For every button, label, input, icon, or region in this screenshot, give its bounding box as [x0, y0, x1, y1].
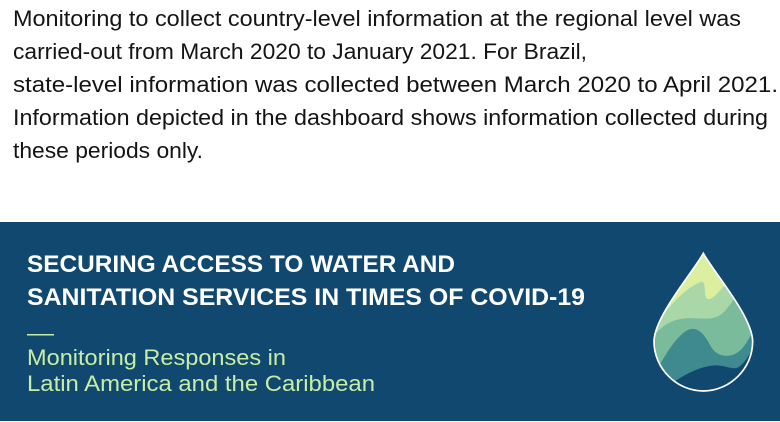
icon: water drop: [650, 250, 757, 393]
subtitle: monitoring responses: Monitoring Responses in: [27, 345, 286, 370]
text block: monitoring note: [13, 6, 778, 163]
subtitle: monitoring responses: Latin America and the Caribbean: [27, 371, 375, 396]
text block: monitoring note: state-level information was collected between March 2020 to April 2021.: [13, 72, 778, 97]
heading: banner title: [27, 251, 585, 311]
heading: banner title: SANITATION SERVICES IN TIMES OF COVID-19: [27, 284, 585, 311]
text block: monitoring note: Monitoring to collect country-level information at the regional level was: [13, 6, 741, 31]
subtitle: monitoring responses: [27, 345, 375, 396]
panel: banner: [0, 222, 780, 421]
heading: banner title: SECURING ACCESS TO WATER AND: [27, 251, 455, 278]
text block: monitoring note: Information depicted in the dashboard shows information collected during: [13, 105, 768, 130]
text block: monitoring note: these periods only.: [13, 138, 203, 163]
text block: monitoring note: carried-out from March 2020 to January 2021. For Brazil,: [13, 39, 587, 64]
